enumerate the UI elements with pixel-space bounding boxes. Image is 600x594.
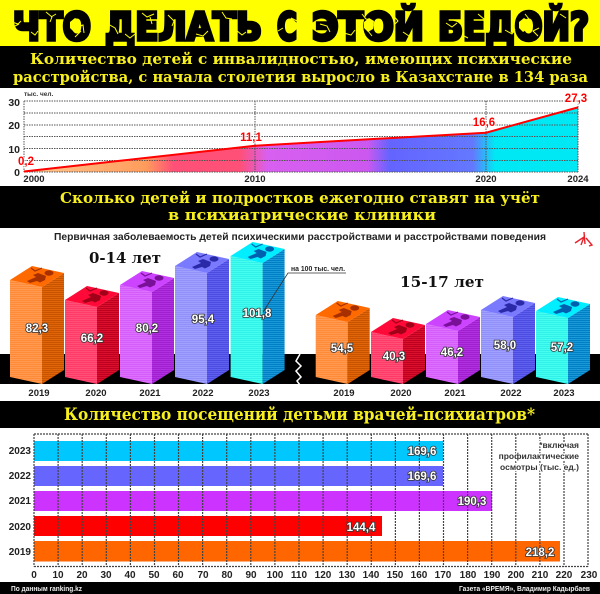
bars <box>34 441 560 562</box>
header band: disability statistic: расстройства, с начала столетия выросло в Казахстане в 134 раза <box>13 68 588 86</box>
x axis labels: 2024 <box>567 174 589 185</box>
bar 2019 <box>10 266 64 384</box>
axis numbers: 30 <box>100 570 112 581</box>
values: 46,2 <box>441 347 463 359</box>
age label 0-14: 0-14 лет <box>89 249 161 267</box>
header band: psychiatrist visits <box>0 401 600 428</box>
title banner <box>0 0 600 49</box>
values: 54,5 <box>331 343 354 355</box>
callout: per 100 thousand <box>263 264 346 312</box>
bar 2021 <box>426 310 480 384</box>
value labels: 11,1 <box>240 132 262 144</box>
axis numbers: 0 <box>31 570 37 581</box>
x axis labels: 2010 <box>244 174 266 185</box>
year labels <box>9 446 31 558</box>
values <box>26 308 272 345</box>
values: 40,3 <box>383 351 405 363</box>
x axis labels: 2020 <box>475 174 497 185</box>
area chart: children with disabilities 2000-2024 <box>8 91 589 185</box>
header band: disability statistic: Количество детей с инвалидностью, имеющих психические <box>30 50 572 68</box>
title banner: ЭТОЙ <box>312 5 424 49</box>
bar 2020 <box>65 286 119 384</box>
footnote: профилактические <box>499 451 579 461</box>
red trend line <box>24 107 578 172</box>
axis numbers: 50 <box>148 570 160 581</box>
years: 2023 <box>553 388 575 399</box>
year labels: 2019 <box>9 547 31 558</box>
bar 2019 <box>316 301 370 384</box>
years: 2023 <box>248 388 270 399</box>
year labels: 2020 <box>9 522 31 533</box>
years <box>333 388 575 399</box>
values: 58,0 <box>494 340 516 352</box>
year labels: 2022 <box>9 471 31 482</box>
footnote: осмотры (тыс. ед.) <box>500 462 579 472</box>
header band: psychiatrist visits: Количество посещений детьми врачей-психиатров* <box>64 405 535 424</box>
axis numbers: 220 <box>556 570 573 581</box>
values: 57,2 <box>551 342 573 354</box>
value labels: 144,4 <box>347 522 376 534</box>
age label 15-17: 15-17 лет <box>400 273 484 291</box>
values: 80,2 <box>136 323 158 335</box>
axis numbers: 180 <box>460 570 477 581</box>
axis numbers: 40 <box>124 570 136 581</box>
axis numbers: 230 <box>581 570 598 581</box>
axis numbers: 120 <box>315 570 332 581</box>
value labels: 218,2 <box>526 547 554 559</box>
years: 2022 <box>192 388 214 399</box>
value labels <box>347 446 554 559</box>
axis numbers: 190 <box>484 570 501 581</box>
years: 2021 <box>139 388 161 399</box>
footnote: *включая <box>539 440 579 450</box>
title banner: С <box>277 5 297 49</box>
black floor strip <box>0 354 600 384</box>
title banner: ЧТО <box>13 5 91 49</box>
bar 2022 <box>175 252 229 384</box>
years: 2019 <box>333 388 355 399</box>
y axis labels <box>8 97 20 179</box>
axis numbers: 10 <box>52 570 64 581</box>
bar 2023 <box>231 242 285 384</box>
axis numbers: 200 <box>508 570 525 581</box>
axis numbers: 70 <box>197 570 209 581</box>
grid <box>24 101 578 172</box>
years: 2019 <box>28 388 50 399</box>
bars group: 15-17 years <box>316 296 590 399</box>
value labels: 16,6 <box>473 117 495 129</box>
y axis labels: 0 <box>14 167 20 179</box>
axis numbers: 80 <box>221 570 233 581</box>
values: 95,4 <box>192 314 215 326</box>
axis numbers: 100 <box>267 570 284 581</box>
years: 2020 <box>85 388 107 399</box>
callout: per 100 thousand: на 100 тыс. чел. <box>291 264 345 273</box>
values: 66,2 <box>81 333 103 345</box>
y axis labels: 30 <box>8 97 20 109</box>
years: 2020 <box>390 388 412 399</box>
value labels: 0,2 <box>18 156 34 168</box>
grid <box>34 434 588 566</box>
x axis labels: 2000 <box>23 174 45 185</box>
footnote <box>499 440 579 472</box>
axis numbers: 90 <box>245 570 257 581</box>
footer <box>0 582 600 594</box>
header band: disability statistic <box>0 46 600 88</box>
values: 82,3 <box>26 323 48 335</box>
footer: По данным ranking.kz <box>11 584 82 593</box>
axis numbers <box>31 570 598 581</box>
axis numbers: 150 <box>387 570 404 581</box>
horizontal bar chart: visits <box>9 434 598 581</box>
unit label: тыс. чел. <box>24 91 53 98</box>
value labels <box>18 93 587 168</box>
subtitle: Первичная заболеваемость детей психическими расстройствами и расстройствами поведения <box>54 231 546 243</box>
header band: psychiatric registration: в психиатрические клиники <box>168 206 436 224</box>
value labels: 190,3 <box>458 496 486 508</box>
title banner: ДЕЛАТЬ <box>105 5 262 49</box>
value labels: 27,3 <box>565 93 587 105</box>
axis numbers: 140 <box>363 570 380 581</box>
bar 2023 <box>536 297 590 384</box>
bars group: 0-14 years <box>10 242 285 399</box>
value labels: 169,6 <box>408 471 436 483</box>
bar 2021 <box>120 271 174 384</box>
zigzag break <box>296 354 301 385</box>
x axis labels <box>23 174 589 185</box>
years <box>28 388 270 399</box>
y axis labels: 10 <box>8 144 20 156</box>
bar 2022 <box>481 296 535 384</box>
icon: author mark <box>575 232 592 246</box>
years: 2022 <box>500 388 522 399</box>
values <box>331 340 573 363</box>
year labels: 2023 <box>9 446 31 457</box>
axis numbers: 130 <box>339 570 356 581</box>
values: 101,8 <box>243 308 272 320</box>
value labels: 169,6 <box>408 446 436 458</box>
axis numbers: 110 <box>291 570 308 581</box>
year labels: 2021 <box>9 496 31 507</box>
bar 2020 <box>371 318 425 384</box>
header band: psychiatric registration <box>0 186 600 228</box>
area fill <box>24 107 578 172</box>
years: 2021 <box>444 388 466 399</box>
y axis labels: 20 <box>8 120 20 132</box>
axis numbers: 60 <box>172 570 184 581</box>
axis numbers: 210 <box>532 570 549 581</box>
axis numbers: 20 <box>76 570 88 581</box>
header band: psychiatric registration: Сколько детей и подростков ежегодно ставят на учёт <box>60 189 540 207</box>
axis numbers: 160 <box>411 570 428 581</box>
axis numbers: 170 <box>435 570 452 581</box>
